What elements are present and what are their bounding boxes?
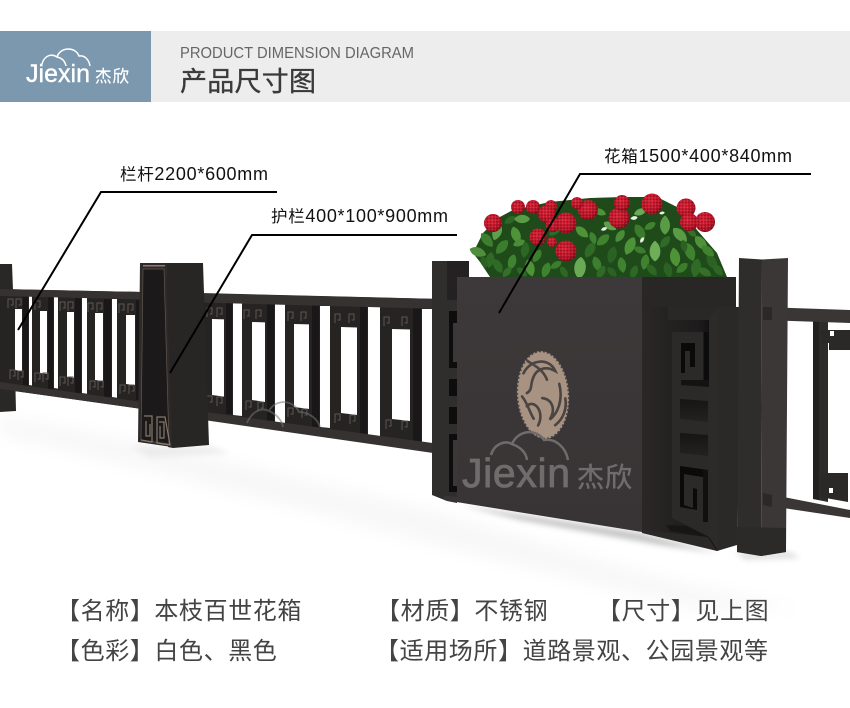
middle railing openings (212, 303, 435, 445)
right railing section (763, 307, 850, 518)
chinese heading: 产品尺寸图 (180, 67, 316, 97)
logo chinese name: 杰欣 (95, 67, 129, 86)
upper key (681, 332, 709, 387)
right post (737, 258, 788, 556)
dimension label: planter (499, 146, 811, 313)
header band (0, 31, 850, 102)
flower bush (468, 194, 727, 280)
pillar right face (166, 263, 209, 448)
left railing body (0, 289, 142, 409)
left railing openings (15, 296, 135, 398)
left top rail (0, 289, 142, 300)
railing leader line (18, 192, 277, 330)
key column (672, 332, 709, 537)
planter side top (642, 277, 736, 307)
guard post label text: 护栏400*100*900mm (271, 206, 448, 226)
spec: material: 【材质】不锈钢 (376, 598, 548, 625)
lower key (680, 466, 708, 522)
logo panel (0, 31, 151, 102)
red flower heads (484, 194, 715, 262)
far left post (0, 264, 16, 412)
guard post leader line (170, 235, 457, 373)
pillar front face (138, 263, 172, 447)
planter label text: 花箱1500*400*840mm (604, 146, 792, 166)
right post left face (737, 258, 762, 556)
pillar left foot key (141, 416, 152, 442)
planter watermark (462, 432, 632, 496)
bush base (473, 197, 727, 277)
slot one (680, 399, 708, 422)
planter front face (444, 277, 642, 532)
right rail stubs (763, 307, 772, 320)
middle railing key ornaments (207, 308, 407, 430)
right top rail (763, 307, 850, 323)
right bottom rail (763, 493, 850, 518)
spec: name: 【名称】本枝百世花箱 (56, 598, 302, 625)
pillar top trim (143, 265, 165, 266)
floor shadows (0, 415, 800, 610)
watermark chinese name: 杰欣 (577, 463, 632, 493)
side frame top band (668, 307, 718, 320)
middle railing bar shading (226, 302, 421, 442)
dimension label: guard post (170, 206, 457, 373)
leaves (468, 207, 725, 280)
watermark cloud (491, 432, 568, 460)
planter left post (432, 261, 469, 503)
spec: size: 【尺寸】见上图 (597, 598, 769, 625)
railing label text: 栏杆2200*600mm (120, 164, 268, 184)
right top key ornament (820, 330, 850, 350)
side frame right face (717, 307, 740, 551)
spec: colour: 【色彩】白色、黑色 (56, 638, 277, 665)
planter side body (642, 307, 718, 551)
key holes (829, 331, 834, 493)
guard post pillar (138, 263, 209, 448)
planter box (432, 261, 740, 551)
slot two (680, 433, 708, 456)
emblem (514, 349, 572, 441)
pillar front recess (141, 269, 169, 444)
left slot cutouts (449, 311, 457, 492)
logo wordmark: Jiexin (26, 60, 90, 88)
right vertical frame (813, 320, 828, 502)
english heading: PRODUCT DIMENSION DIAGRAM (180, 45, 414, 62)
right post foot (737, 527, 786, 556)
right bottom key ornament (820, 473, 848, 502)
left bottom rail (0, 382, 142, 409)
dimension label: railing (18, 164, 277, 330)
middle railing section (182, 293, 440, 454)
left railing key ornaments (8, 299, 134, 394)
side frame bottom band (642, 530, 717, 551)
product specifications (56, 598, 769, 665)
middle railing body (200, 293, 440, 453)
side frame inner strip (709, 307, 718, 551)
planter leader line (499, 174, 811, 313)
spec: applicable places: 【适用场所】道路景观、公园景观等 (375, 638, 769, 665)
faint fence watermark (247, 402, 320, 427)
icon: cloud (42, 49, 90, 66)
left railing section (0, 289, 142, 409)
left railing bar shading (23, 296, 139, 400)
middle top rail (182, 293, 440, 309)
right post right face (761, 258, 788, 556)
pillar right foot key (157, 417, 170, 445)
middle bottom rail (183, 409, 440, 454)
watermark wordmark: Jiexin (462, 450, 570, 496)
